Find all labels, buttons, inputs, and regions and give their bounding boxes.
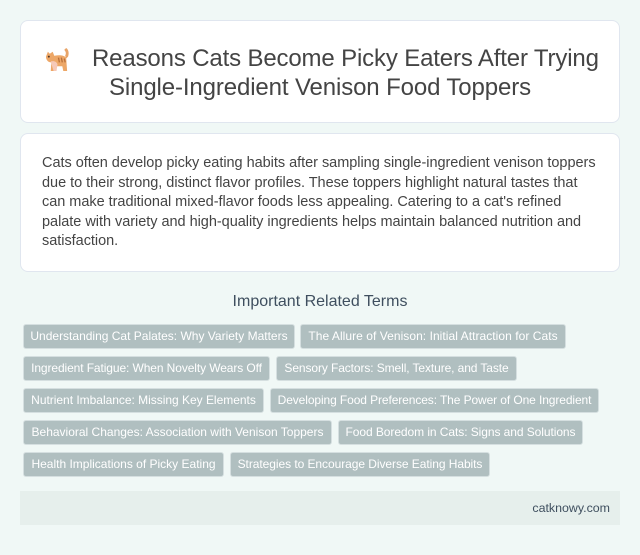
heading: title line 1: Reasons Cats Become Picky Eaters After Trying [92, 45, 599, 72]
tag: Sensory Factors: Smell, Texture, and Taste [284, 361, 509, 375]
tag: Ingredient Fatigue: When Novelty Wears Off [31, 361, 262, 375]
footer text: catknowy.com [532, 501, 610, 515]
tag list: related terms [23, 324, 599, 477]
text block: description: due to their strong, distinct flavor profiles. These toppers highlight natural tastes that [42, 175, 577, 191]
tag: Nutrient Imbalance: Missing Key Elements [31, 393, 256, 407]
icon: cat [46, 48, 69, 71]
tag [270, 388, 599, 413]
tag [23, 452, 224, 477]
text block: description [42, 155, 596, 249]
tag [276, 356, 517, 381]
panel: description card [20, 133, 620, 272]
text block: description: palate with variety and high-quality ingredients helps maintain balanced nutrition and [42, 214, 581, 230]
tag [23, 420, 332, 445]
tag: The Allure of Venison: Initial Attraction for Cats [308, 329, 558, 343]
text block: description: satisfaction. [42, 233, 118, 249]
text block: description: Cats often develop picky eating habits after sampling single-ingredient venison toppers [42, 155, 596, 171]
tag [23, 388, 264, 413]
tag [300, 324, 566, 349]
tag: Developing Food Preferences: The Power of One Ingredient [278, 393, 591, 407]
tag: Understanding Cat Palates: Why Variety Matters [30, 329, 288, 343]
tag [23, 356, 270, 381]
heading: title line 2: Single-Ingredient Venison Food Toppers [109, 74, 531, 101]
footer bar [20, 491, 620, 525]
tag: Behavioral Changes: Association with Venison Toppers [32, 425, 323, 439]
panel: title card [20, 20, 620, 123]
tag [230, 452, 490, 477]
tag: Strategies to Encourage Diverse Eating Habits [238, 457, 482, 471]
tag [23, 324, 295, 349]
heading: related terms: Important Related Terms [233, 293, 407, 310]
text block: description: can make traditional mixed-flavor foods less appealing. Catering to a cat's refined [42, 194, 561, 210]
tag: Health Implications of Picky Eating [31, 457, 216, 471]
tag: Food Boredom in Cats: Signs and Solutions [346, 425, 575, 439]
tag [338, 420, 583, 445]
